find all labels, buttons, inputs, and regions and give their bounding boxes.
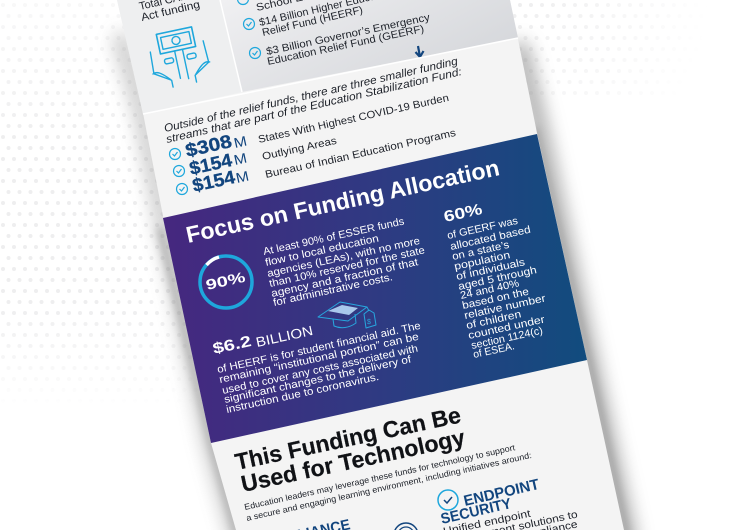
text: ESSER funds: than 10% reserved for the state [268,244,426,290]
icon: hands holding money [145,25,213,91]
list item: GEERF: Education Relief Fund (GEERF) [266,23,425,68]
text: HEERF: used to cover any costs associated with [221,343,419,397]
heading: this funding can be used for technology: Used for Technology [239,424,467,497]
text: ESSER funds: agency and a fraction of that [270,256,419,300]
row: $308M: $308 [183,130,234,161]
list item: GEERF: $3 Billion Governor’s Emergency [265,11,432,58]
heading: endpoint security: ENDPOINT [462,476,541,510]
text: GEERF allocation: allocated based [449,224,532,253]
icon: down arrow [416,46,424,57]
text: smaller funding streams intro: Outside of the relief funds, there are three smaller funding [163,55,460,135]
text: ESSER funds [262,216,426,309]
text: HEERF: remaining “institutional portion” can be [218,331,420,386]
row: $154M outlying areas: $154 [187,149,235,179]
icon: graduation cap with price tag: $ [367,319,371,326]
section: endpoint security [438,476,579,530]
panel: total CARES Act funding [117,0,242,114]
panel: focus on funding allocation [163,134,587,443]
tilted page sheet [117,0,624,530]
heading: this funding can be used for technology: This Funding Can Be [233,402,463,475]
text: GEERF allocation: population [453,249,512,273]
text: GEERF allocation: of GEERF was [446,215,519,242]
row: $154M Bureau of Indian Education: $154 [190,166,238,196]
panel: relief fund list [220,0,518,92]
icon: graduation cap with price tag [318,302,376,328]
text: ESSER funds: for administrative costs. [272,271,394,309]
heading: focus on funding allocation: Focus on Funding Allocation [184,154,502,248]
row: $154M outlying areas: M [232,149,248,168]
text: HEERF: of HEERF is for student financial aid. The [216,320,422,376]
text: GEERF allocation: relative number [463,292,547,322]
text: technology intro: Education leaders may leverage these funds for technology to support [243,442,517,512]
list item: HEERF: Relief Fund (HEERF) [261,4,364,39]
text: HEERF [216,320,422,416]
text: GEERF allocation: aged 5 through [457,264,538,293]
list item: GEERF [250,11,432,68]
stat: 60%: 60% [442,201,484,226]
page shadow [122,40,628,530]
row: $154M Bureau of Indian Education: Bureau of Indian Education Programs [264,127,457,181]
row: $154M Bureau of Indian Education: M [234,167,250,186]
row: $308M: M [232,132,248,151]
text: GEERF allocation: section 1124(c) [470,325,544,352]
background dot pattern [1,3,624,358]
text: GEERF allocation [446,215,547,361]
row: $308M [170,92,450,161]
text: ESSER funds: agencies (LEAs), with no more [266,235,421,280]
text: GEERF allocation: of ESEA. [472,340,516,361]
text: HEERF: significant changes to the delivery of [223,354,412,406]
stat: $6.2 billion [211,323,314,358]
text: ESSER funds: At least 90% of ESSER funds [262,216,405,258]
chart: 90% donut [200,256,252,308]
text: GEERF allocation: of children [465,308,523,332]
row: $154M Bureau of Indian Education [176,127,457,196]
text: endpoint description [442,508,579,530]
row: $154M outlying areas [174,135,338,179]
list item: HEERF [244,0,394,39]
row: $308M: States With Highest COVID-19 Burden [257,92,450,146]
text: HEERF: instruction due to coronavirus. [225,371,380,416]
text: smaller funding streams intro: streams that are part of the Education Stabilization Fund: [165,66,463,146]
section: compliance, partially cropped [254,516,418,530]
stat: $6.2 billion: BILLION [254,323,314,350]
text: total CARES Act funding: Act funding [140,0,201,24]
chart: 90% donut: 90% [204,270,247,294]
text: GEERF allocation: of individuals [455,256,526,283]
icon: check circle [438,490,458,510]
text: GEERF allocation: based on the [461,286,530,312]
stat: $6.2 billion: $6.2 [211,333,253,358]
list: funding streams [170,92,457,196]
divider lines [143,0,518,114]
text: technology intro: a secure and engaging learning environment, including initiatives around: [245,450,533,523]
text: ESSER funds: flow to local education [264,232,380,269]
heading: endpoint security: SECURITY [439,495,513,528]
heading: endpoint security [439,476,541,528]
text: GEERF allocation: on a state’s [451,239,510,263]
text: GEERF allocation: 24 and 40% [459,277,520,302]
row: $154M outlying areas: Outlying Areas [261,135,338,163]
text: GEERF allocation: counted under [467,313,546,342]
